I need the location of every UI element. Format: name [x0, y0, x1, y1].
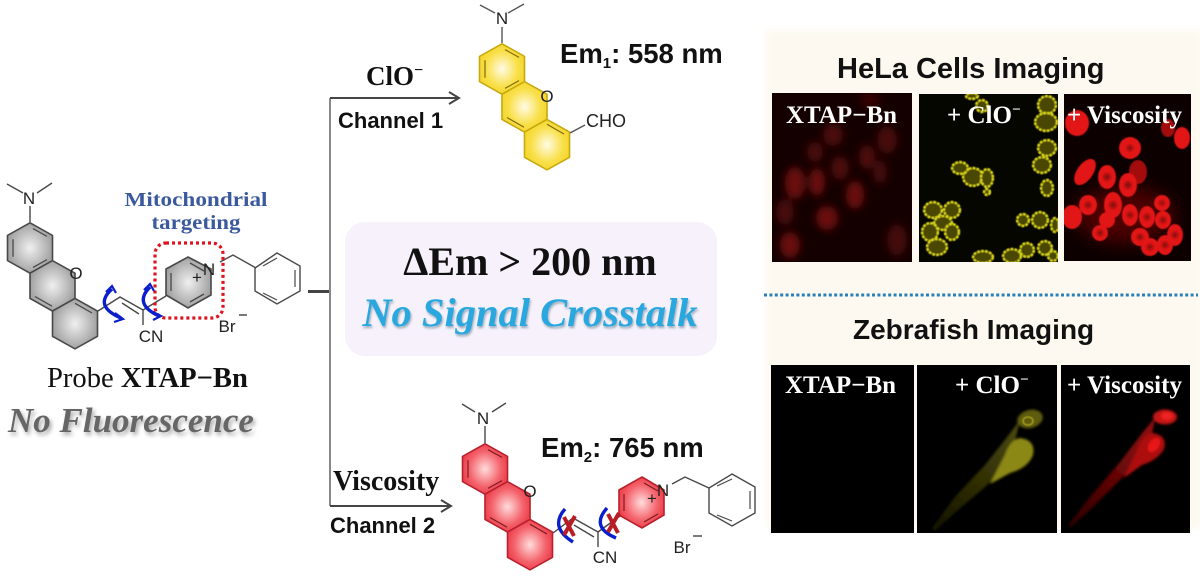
heading: HeLa cells imaging: HeLa Cells Imaging	[837, 53, 1105, 85]
image: HeLa ClO- channel	[919, 94, 1058, 262]
molecule: yellow aldehyde product: O	[540, 87, 554, 106]
label: HeLa ClO-: + ClO	[947, 102, 1012, 129]
label: emission 2: Em	[541, 432, 584, 463]
label: channel 2 reagent: Viscosity	[333, 466, 439, 497]
image: HeLa viscosity channel	[1064, 94, 1191, 261]
label: channel 1 reagent: −	[414, 62, 423, 79]
molecule: probe structure: O	[69, 264, 83, 283]
molecule: red viscosity state: N	[657, 481, 669, 500]
divider	[764, 294, 1198, 296]
icon: rotation arrows	[104, 284, 161, 322]
label: emission 1: 1	[603, 55, 611, 72]
panel: imaging background	[766, 30, 1200, 528]
callout: delta Em: ΔEm > 200 nm	[403, 239, 657, 284]
label: channel 2: Channel 2	[330, 513, 435, 538]
label: mitochondrial targeting	[124, 189, 268, 234]
label: zebrafish probe: XTAP−Bn	[785, 372, 896, 399]
label: HeLa viscosity: + Viscosity	[1067, 102, 1182, 129]
molecule: probe structure: CN	[139, 327, 163, 346]
heading: zebrafish imaging: Zebrafish Imaging	[853, 314, 1094, 345]
panel: probe XTAP-Bn	[7, 183, 300, 440]
label: HeLa ClO-: −	[1012, 102, 1021, 118]
label: mitochondrial targeting: targeting	[152, 212, 240, 234]
molecule: yellow aldehyde product: N	[496, 9, 508, 28]
molecule: probe structure	[7, 183, 300, 349]
molecule: red viscosity state: +	[647, 489, 657, 508]
label: HeLa probe: XTAP−Bn	[786, 102, 897, 129]
label: mitochondrial targeting: Mitochondrial	[124, 189, 268, 211]
image: zebrafish ClO- channel	[917, 365, 1057, 533]
callout: mitochondrial targeting box	[155, 243, 223, 318]
label: emission 1: : 558 nm	[611, 38, 723, 69]
image: zebrafish probe only	[771, 365, 914, 533]
callout: delta Em	[345, 222, 717, 356]
molecule: red viscosity state	[462, 403, 755, 570]
molecule: red viscosity state: CN	[593, 548, 617, 567]
image: HeLa probe only	[772, 93, 912, 262]
molecule: red viscosity state: Br	[674, 538, 691, 557]
arrow: reaction branches	[308, 92, 459, 512]
label: zebrafish ClO-: + ClO	[955, 372, 1020, 399]
molecule: probe structure: Br	[218, 317, 236, 336]
molecule: yellow aldehyde product	[480, 4, 626, 170]
molecule: red viscosity state: O	[523, 482, 537, 501]
molecule: red viscosity state: N	[477, 409, 489, 428]
callout: delta Em: No Signal Crosstalk	[361, 290, 698, 335]
label: probe name: Probe XTAP−Bn	[47, 363, 248, 394]
label: emission 2: : 765 nm	[592, 432, 704, 463]
molecule: yellow aldehyde product: CHO	[586, 111, 626, 131]
label: emission 2: 2	[584, 449, 592, 466]
image: zebrafish viscosity channel	[1061, 365, 1190, 533]
molecule: probe structure: N	[23, 189, 35, 208]
label: no fluorescence: No Fluorescence	[7, 401, 254, 440]
molecule: probe structure: N	[203, 260, 215, 279]
label: emission 1: Em	[560, 38, 603, 69]
label: zebrafish viscosity: + Viscosity	[1067, 372, 1182, 399]
label: channel 1 reagent: ClO	[366, 61, 414, 91]
label: zebrafish ClO-: −	[1020, 372, 1029, 388]
label: channel 1: Channel 1	[338, 108, 443, 133]
molecule: probe structure: +	[192, 268, 202, 287]
